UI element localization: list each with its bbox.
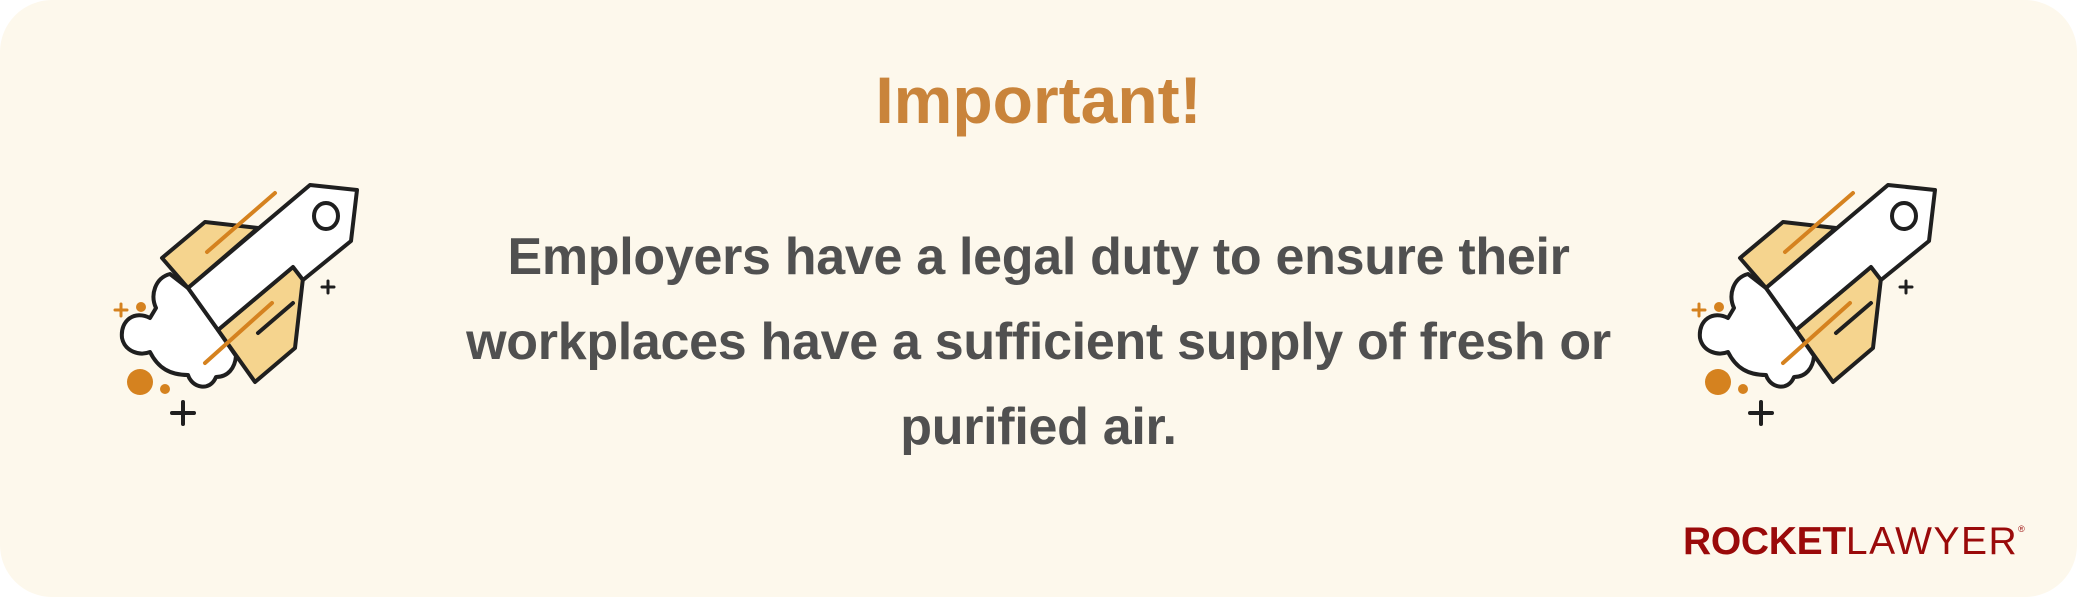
body text: purified air. [900,398,1177,456]
icon: rocket right [1692,183,1937,426]
title: Important! [875,63,1202,137]
body text: Employers have a legal duty to ensure their [507,228,1570,286]
logo: Rocket Lawyer: ROCKETLAWYER® [1683,520,2024,563]
icon: rocket left [114,183,359,426]
body text: workplaces have a sufficient supply of fresh or [466,313,1611,371]
body text [466,228,1611,456]
